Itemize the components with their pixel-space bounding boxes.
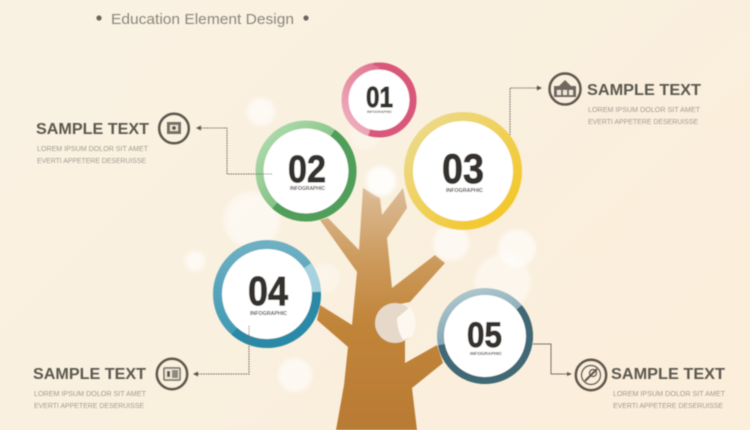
label 03: SAMPLE TEXT <box>587 82 701 99</box>
label 03 <box>587 82 701 126</box>
tree <box>317 188 445 430</box>
icon: camera <box>159 114 189 143</box>
background bubbles <box>185 98 536 392</box>
connector: 04 to label <box>193 326 249 376</box>
label 05: SAMPLE TEXT <box>611 366 725 383</box>
circle 02: 02 <box>288 149 326 191</box>
label 03: EVERTI APPETERE DESERUISSE <box>588 119 698 126</box>
circle 03: 03 <box>442 145 484 192</box>
label 05: EVERTI APPETERE DESERUISSE <box>613 403 723 410</box>
circle 03: INFOGRAPHIC <box>446 188 483 194</box>
circle 01: INFOGRAPHIC <box>367 110 392 114</box>
title: Education Element Design <box>111 11 294 28</box>
foreground bubbles <box>366 166 469 261</box>
circle 04 <box>198 225 336 363</box>
label 04: SAMPLE TEXT <box>33 366 146 383</box>
label 04: EVERTI APPETERE DESERUISSE <box>34 403 144 410</box>
circle 05: 05 <box>467 316 502 355</box>
label 03: LOREM IPSUM DOLOR SIT AMET <box>588 107 701 114</box>
connector: 02 to label <box>196 126 272 174</box>
circle 01 <box>342 63 416 137</box>
label 04: LOREM IPSUM DOLOR SIT AMET <box>34 391 147 398</box>
icon: disc <box>576 360 606 390</box>
label 04 <box>33 366 147 410</box>
label 02: EVERTI APPETERE DESERUISSE <box>37 158 146 165</box>
circle 03 <box>408 116 518 226</box>
icon: school building <box>550 74 580 104</box>
circle 01: 01 <box>366 82 393 114</box>
circle 02: INFOGRAPHIC <box>290 186 325 192</box>
tree hollow bubble <box>375 303 416 343</box>
label 05: LOREM IPSUM DOLOR SIT AMET <box>613 391 726 398</box>
circle 04: 04 <box>248 268 288 314</box>
connector: 03 to label <box>510 86 542 135</box>
label 02: LOREM IPSUM DOLOR SIT AMET <box>37 146 149 153</box>
connector: 05 to label <box>533 344 572 376</box>
label 05 <box>611 366 726 410</box>
label 02 <box>36 121 149 165</box>
circle 04: INFOGRAPHIC <box>250 311 287 317</box>
circle 05: INFOGRAPHIC <box>470 351 503 356</box>
circle 02 <box>241 106 371 236</box>
icon: id card <box>157 359 187 389</box>
circle 05 <box>422 273 548 399</box>
label 02: SAMPLE TEXT <box>36 121 149 138</box>
